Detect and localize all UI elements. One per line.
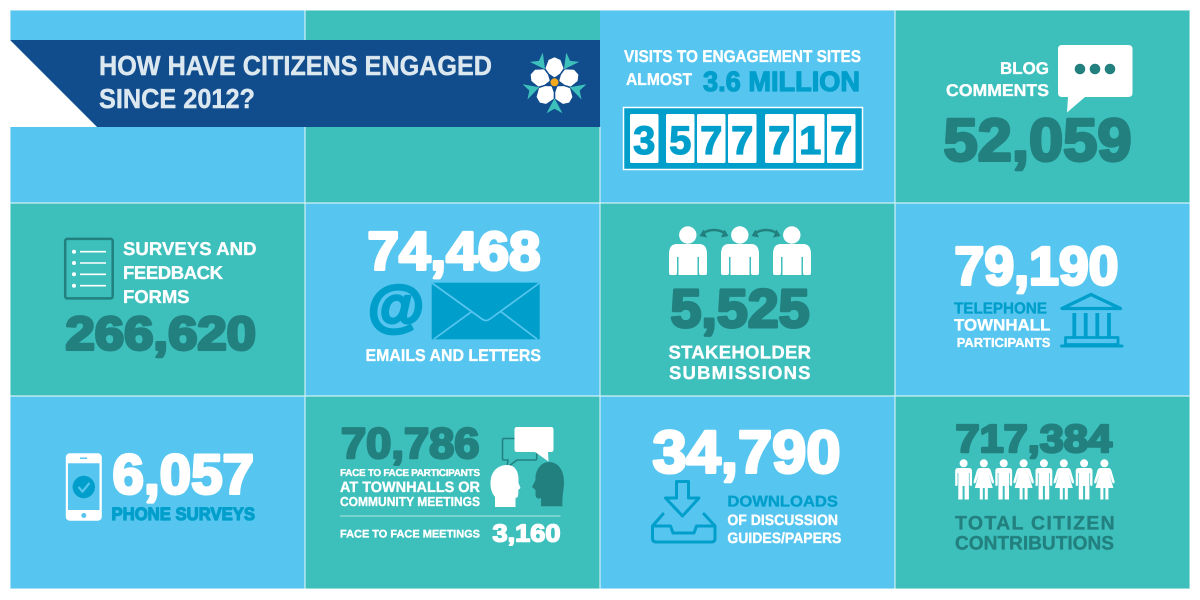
icon: row of citizens [955,459,1115,500]
visit counter [624,108,862,170]
panel: emails and letters: 74,468 [368,222,540,282]
panel: visits to engagement sites: 3.6 MILLION [703,66,860,97]
visit counter: 1 [799,119,821,163]
panel: emails and letters: EMAILS AND LETTERS [366,346,541,365]
panel: downloads: 34,790 [652,418,840,486]
icon: speech bubble [1058,45,1132,112]
title banner: HOW HAVE CITIZENS ENGAGED [99,50,492,81]
panel: telephone townhall participants: PARTICIPANTS [957,335,1051,350]
visit counter: 7 [768,119,790,163]
title banner: SINCE 2012? [99,83,255,114]
icon: two heads talking [490,427,564,507]
panel: downloads: DOWNLOADS [727,494,838,511]
panel: total citizen contributions: 717,384 [956,418,1112,461]
panel: blog comments: BLOG [1000,59,1049,78]
panel: visits to engagement sites: VISITS TO ENGAGEMENT SITES [624,47,861,66]
visit counter: 3 [633,119,655,163]
icon: at sign: @ [368,274,424,337]
icon: checklist document [65,239,113,298]
icon: envelope [432,283,540,339]
panel: face to face: 70,786 [341,420,480,468]
panel: stakeholder submissions: 5,525 [670,279,810,339]
panel: surveys and feedback forms: FEEDBACK [123,262,224,283]
panel: surveys and feedback forms [10,203,305,396]
icon: download tray [652,482,715,542]
panel: telephone townhall participants: 79,190 [954,236,1118,296]
panel: total citizen contributions [895,396,1190,589]
panel: downloads: OF DISCUSSION [727,512,838,529]
panel: visits to engagement sites [600,10,895,203]
visit counter: 5 [669,119,691,163]
panel: surveys and feedback forms: FORMS [123,286,190,307]
panel: emails and letters [305,203,600,396]
icon: dogwood flower [523,53,586,113]
panel: blog comments: 52,059 [944,106,1132,174]
panel: stakeholder submissions: SUBMISSIONS [669,362,810,383]
panel: phone surveys: 6,057 [112,442,254,506]
title banner [10,40,600,127]
panel: face to face: AT TOWNHALLS OR [340,479,480,496]
panel: telephone townhall participants: TELEPHONE [954,300,1047,317]
visit counter: 7 [700,119,722,163]
panel: downloads: GUIDES/PAPERS [727,530,841,547]
panel: stakeholder submissions: STAKEHOLDER [668,341,811,362]
icon: townhall building [1062,294,1122,346]
panel: face to face: COMMUNITY MEETINGS [340,494,480,509]
panel: telephone townhall participants: TOWNHALL [954,317,1050,335]
panel: surveys and feedback forms: SURVEYS AND [123,238,256,259]
panel: top second background [305,10,600,203]
panel: visits to engagement sites: ALMOST [626,70,693,89]
icon: three people exchanging [669,226,811,275]
panel: total citizen contributions: TOTAL CITIZEN [955,512,1115,534]
panel: face to face: FACE TO FACE MEETINGS [340,529,480,541]
panel: blog comments: COMMENTS [946,81,1049,100]
panel: face to face: 3,160 [492,520,560,548]
panel: stakeholder submissions [600,203,895,396]
panel: phone surveys: PHONE SURVEYS [112,504,255,524]
panel: downloads [600,396,895,589]
visit counter: 7 [731,119,753,163]
icon: smartphone with check [66,453,102,521]
panel: phone surveys [10,396,305,589]
panel: top left background [10,10,305,203]
panel: blog comments [895,10,1190,203]
panel: surveys and feedback forms: 266,620 [66,306,256,360]
panel: telephone townhall participants [895,203,1190,396]
visit counter: 7 [830,119,852,163]
panel: face to face: FACE TO FACE PARTICIPANTS [340,468,480,479]
panel: total citizen contributions: CONTRIBUTIONS [955,533,1114,555]
panel: face to face [305,396,600,589]
